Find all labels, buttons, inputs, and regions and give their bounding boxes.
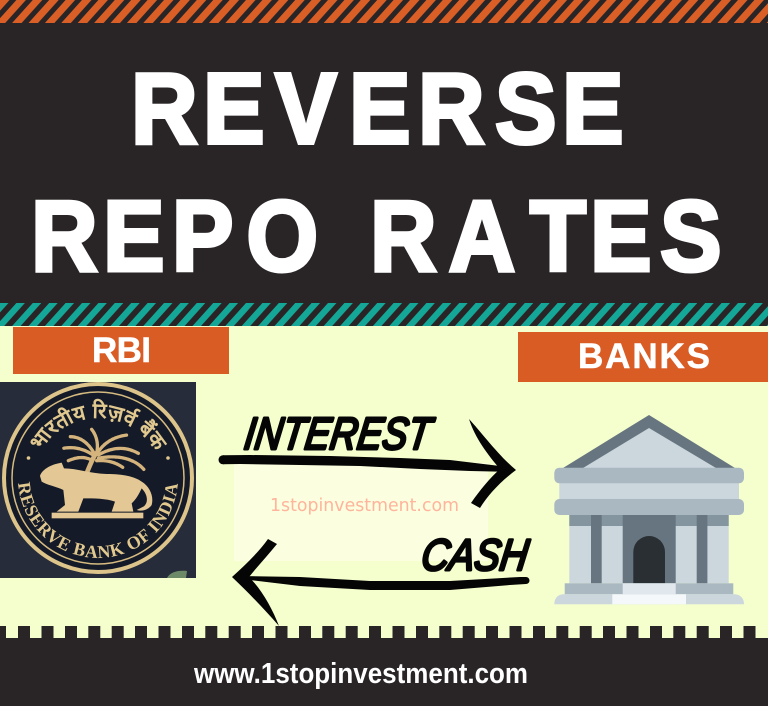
crenellated edge: [0, 626, 756, 638]
text: cash: CASH: [419, 531, 532, 580]
title panel: [0, 0, 768, 326]
icon: RBI emblem: [0, 382, 196, 578]
RBI label: [13, 327, 229, 374]
RBI label: RBI: [92, 331, 151, 370]
watermark panel: [234, 463, 488, 561]
emblem leaves corner: [167, 571, 187, 578]
icon: bank building: [554, 415, 744, 604]
arrow: interest: [218, 419, 516, 508]
BANKS label: BANKS: [578, 337, 710, 376]
title line 2: REPO RATES: [31, 181, 721, 293]
emblem palm tree: [63, 429, 144, 472]
cream background panel: [0, 326, 768, 638]
teal striped band: [0, 303, 768, 326]
footer url: www.1stopinvestment.com: [193, 658, 528, 690]
emblem dots: [27, 456, 170, 460]
BANKS label: [518, 332, 768, 382]
arrow: cash: [232, 539, 530, 626]
watermark panel: 1stopinvestment.com: [270, 496, 459, 516]
orange striped band: [0, 0, 768, 23]
title line 1: REVERSE: [131, 53, 623, 165]
footer panel: [0, 626, 768, 706]
emblem text top: भारतीय रिज़र्व बैंक: [30, 398, 168, 450]
emblem text bottom: RESERVE BANK OF INDIA: [18, 482, 178, 558]
text: interest: INTEREST: [242, 408, 438, 459]
emblem tiger: [40, 463, 152, 518]
